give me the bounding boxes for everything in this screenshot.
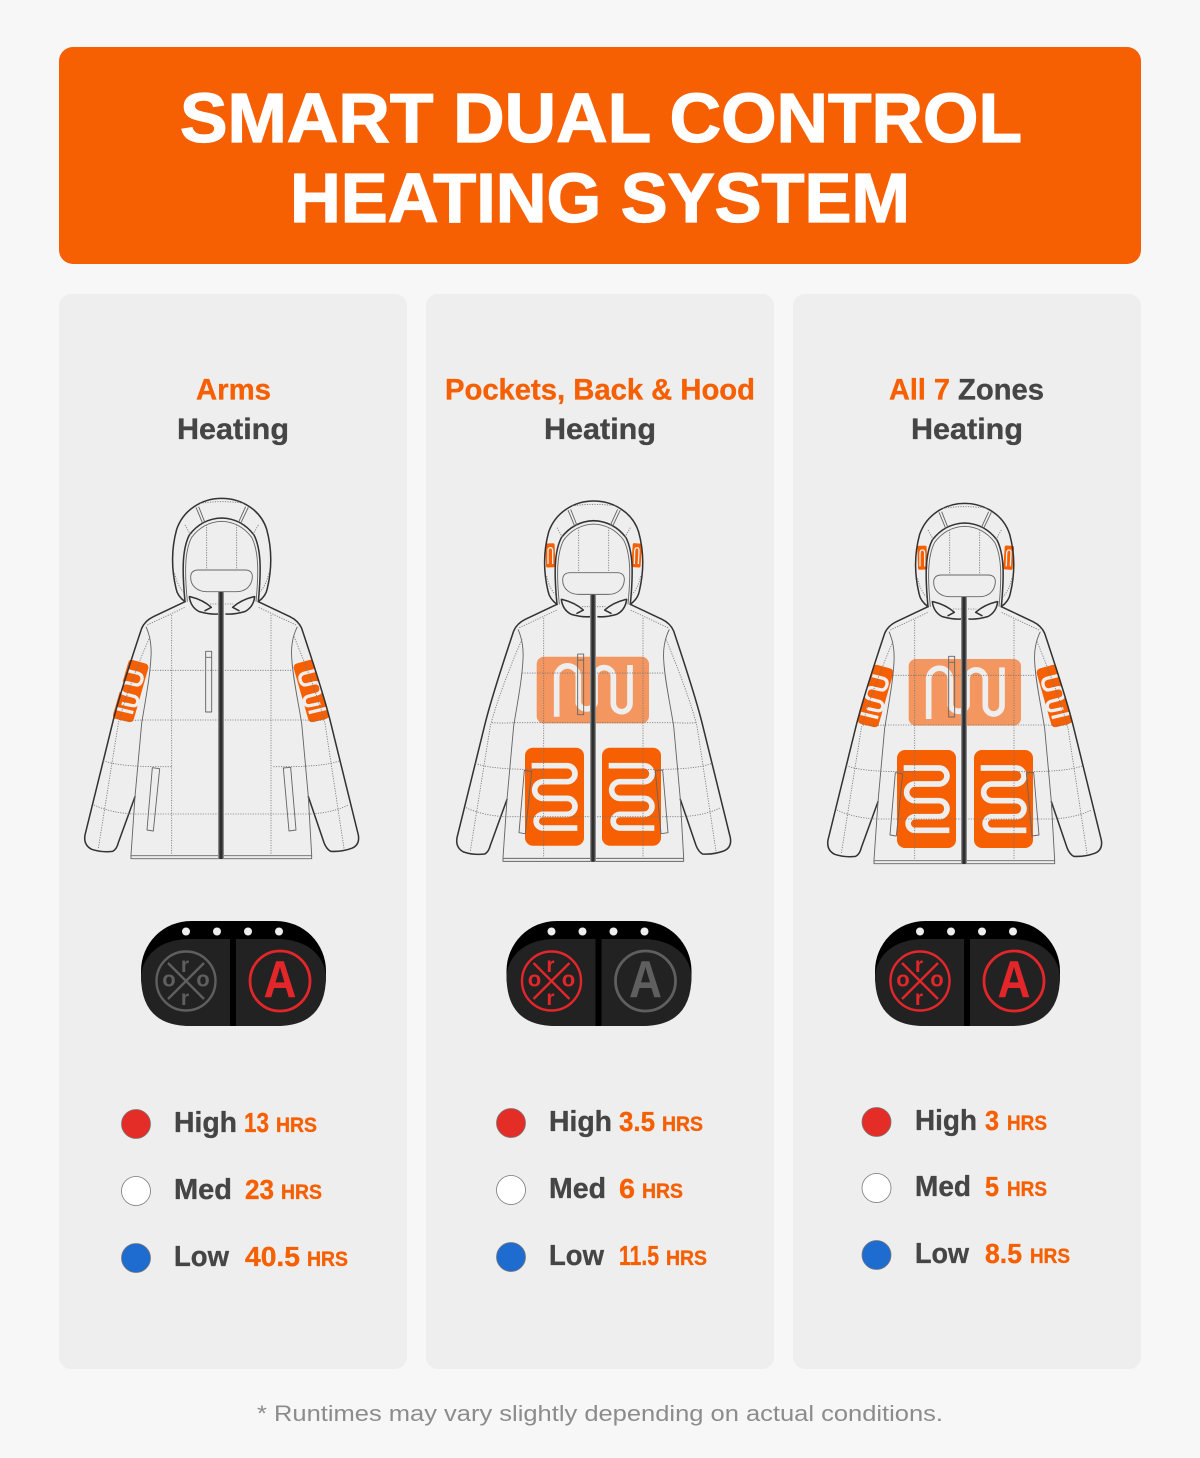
controller: both on: o — [896, 966, 910, 992]
controller: left on, right off: A — [629, 951, 662, 1009]
controller: left off, right on: A — [264, 951, 296, 1009]
title banner — [59, 47, 1141, 264]
controller: both on: o — [930, 966, 944, 992]
runtime list: arms: 40.5 — [245, 1241, 300, 1272]
controller: left off, right on: o — [196, 966, 210, 992]
footnote: * Runtimes may vary slightly depending on actual conditions. — [257, 1401, 943, 1426]
runtime list: pockets, back and hood: 3.5 — [619, 1106, 655, 1137]
title banner: SMART DUAL CONTROL — [180, 79, 1022, 157]
runtime list: arms: High — [174, 1107, 237, 1139]
heading: all 7 zones — [889, 374, 1044, 446]
controller: left off, right on: o — [162, 966, 176, 992]
jacket diagram: arms zones — [85, 498, 359, 859]
runtime list: all zones — [862, 1105, 1070, 1270]
runtime list: pockets, back and hood: Med — [549, 1173, 606, 1205]
runtime list: all zones: High — [915, 1105, 977, 1137]
heading: all 7 zones: Zones — [958, 374, 1044, 406]
heading: all 7 zones: Heating — [911, 413, 1023, 446]
runtime list: arms: HRS — [276, 1114, 317, 1137]
runtime list: arms: 23 — [245, 1174, 274, 1205]
runtime list: arms: HRS — [307, 1248, 348, 1271]
controller: left on, right off: r — [546, 987, 555, 1010]
heading: pockets, back and hood — [445, 374, 755, 446]
runtime list: pockets, back and hood: Low — [549, 1240, 604, 1272]
runtime list: all zones: 8.5 — [985, 1238, 1022, 1269]
runtime list: pockets, back and hood: HRS — [662, 1113, 703, 1136]
controller: both on: r — [915, 954, 923, 977]
controller: both on — [875, 921, 1060, 1026]
runtime list: arms: 13 — [244, 1107, 269, 1138]
runtime list: all zones: HRS — [1007, 1112, 1047, 1135]
runtime list: arms — [122, 1107, 348, 1273]
runtime list: all zones: 3 — [985, 1105, 999, 1136]
runtime list: all zones: 5 — [985, 1171, 999, 1202]
controller: left on, right off: r — [546, 954, 555, 977]
panel: arms heating — [59, 294, 407, 1369]
runtime list: arms: Low — [174, 1241, 229, 1273]
runtime list: all zones: Low — [915, 1238, 969, 1270]
controller: left off, right on — [141, 921, 326, 1026]
controller: left off, right on: r — [181, 954, 189, 977]
heading: arms: Arms — [196, 374, 271, 406]
heading: pockets, back and hood: Pockets, Back & Hood — [445, 374, 755, 406]
runtime list: all zones: HRS — [1030, 1245, 1070, 1268]
controller: left on, right off: o — [528, 966, 541, 992]
runtime list: pockets, back and hood: HRS — [666, 1247, 707, 1270]
runtime list: pockets, back and hood: HRS — [642, 1180, 683, 1203]
panel: all 7 zones heating — [793, 294, 1141, 1369]
title banner: HEATING SYSTEM — [290, 159, 910, 237]
heading: pockets, back and hood: Heating — [544, 413, 656, 446]
controller: left off, right on: r — [181, 987, 189, 1010]
runtime list: pockets, back and hood: 11.5 — [619, 1240, 659, 1271]
jacket diagram: all zones — [828, 503, 1102, 864]
panel: pockets, back and hood heating — [426, 294, 774, 1369]
controller: both on: A — [998, 951, 1030, 1009]
heading: all 7 zones: All 7 — [889, 374, 950, 406]
heading: arms: Heating — [177, 413, 289, 446]
runtime list: pockets, back and hood: 6 — [619, 1173, 635, 1204]
runtime list: pockets, back and hood — [496, 1106, 707, 1272]
controller: left on, right off: o — [562, 966, 575, 992]
runtime list: pockets, back and hood: High — [549, 1106, 612, 1138]
runtime list: arms: Med — [174, 1174, 232, 1206]
heading: arms — [177, 374, 289, 446]
runtime list: all zones: Med — [915, 1171, 971, 1203]
runtime list: all zones: HRS — [1007, 1178, 1047, 1201]
jacket diagram: pockets, back, hood zones — [457, 501, 731, 862]
runtime list: arms: HRS — [281, 1181, 322, 1204]
controller: left on, right off — [506, 921, 692, 1026]
controller: both on: r — [915, 987, 923, 1010]
